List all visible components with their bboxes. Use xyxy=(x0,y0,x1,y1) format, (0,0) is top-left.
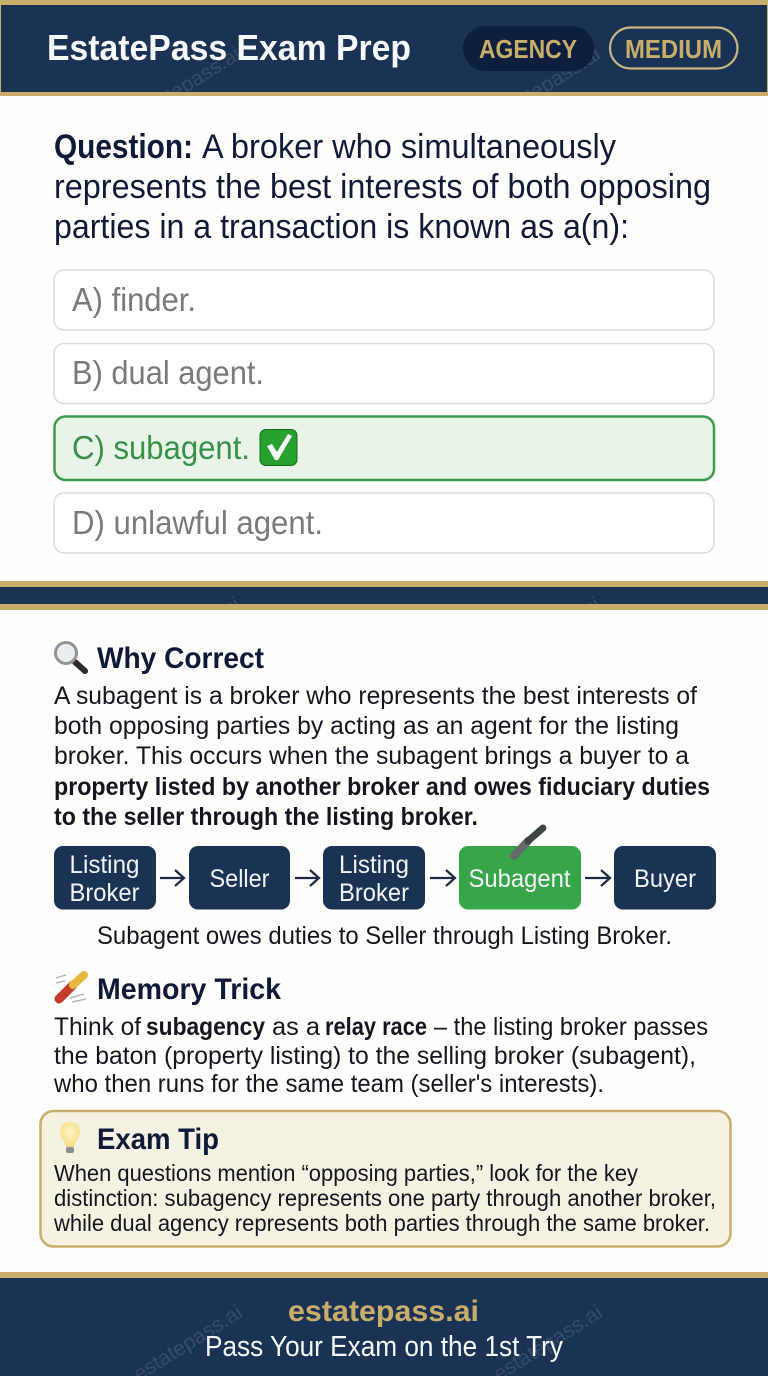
exam tip paragraph: distinction: subagency represents one party through another broker, xyxy=(54,1185,716,1211)
footer xyxy=(0,1272,768,1376)
footer brand: estatepass.ai xyxy=(288,1295,479,1328)
explanation paragraph: broker. This occurs when the subagent brings a buyer to a xyxy=(54,742,689,770)
arrow xyxy=(160,870,184,886)
heading: memory trick: Memory Trick xyxy=(97,973,281,1006)
memory trick paragraph: relay race xyxy=(325,1013,427,1041)
node: buyer xyxy=(614,846,716,910)
icon: baton xyxy=(514,828,543,856)
question text: Question: xyxy=(54,128,193,166)
memory trick paragraph: – the listing broker passes xyxy=(434,1013,708,1041)
arrow xyxy=(585,870,610,886)
arrow xyxy=(430,870,455,886)
node: listing broker xyxy=(323,846,425,910)
node: subagent xyxy=(459,846,581,910)
option A: A) finder. xyxy=(72,281,196,318)
node: listing broker: Listing xyxy=(70,851,140,879)
badge: agency xyxy=(463,26,594,71)
section divider band xyxy=(0,581,768,610)
question text: represents the best interests of both opposing xyxy=(54,168,711,206)
option C correct answer xyxy=(54,416,714,480)
callout: exam tip xyxy=(40,1111,730,1246)
header bar: estatepass.ai xyxy=(488,43,605,128)
memory trick paragraph xyxy=(53,1013,708,1098)
badge: agency: AGENCY xyxy=(479,34,577,64)
flow caption: Subagent owes duties to Seller through Listing Broker. xyxy=(97,922,672,950)
explanation paragraph: property listed by another broker and owes fiduciary duties xyxy=(54,773,710,801)
node: seller xyxy=(189,846,290,910)
node: listing broker: Broker xyxy=(70,879,140,907)
badge: medium xyxy=(610,28,738,68)
memory trick paragraph: the baton (property listing) to the selling broker (subagent), xyxy=(54,1042,696,1070)
explanation paragraph: both opposing parties by acting as an agent for the listing xyxy=(54,712,679,740)
footer tagline: Pass Your Exam on the 1st Try xyxy=(205,1331,563,1363)
icon: light bulb xyxy=(60,1122,80,1153)
section divider band: .ai xyxy=(214,593,245,624)
node: listing broker: Listing xyxy=(339,851,409,879)
explanation paragraph: to the seller through the listing broker. xyxy=(54,803,478,831)
option A xyxy=(54,270,714,330)
option B: B) dual agent. xyxy=(72,354,264,391)
heading: exam tip: Exam Tip xyxy=(97,1123,219,1156)
node: listing broker: Broker xyxy=(339,879,409,907)
explanation paragraph: A subagent is a broker who represents the best interests of xyxy=(54,682,697,710)
header title: EstatePass Exam Prep xyxy=(47,27,411,68)
memory trick paragraph: Think of xyxy=(54,1013,141,1041)
memory trick paragraph: subagency xyxy=(146,1013,265,1041)
header bar: estatepass.ai xyxy=(128,43,245,128)
exam tip paragraph xyxy=(53,1160,716,1236)
badge: medium: MEDIUM xyxy=(625,34,722,64)
heading: why correct: Why Correct xyxy=(97,642,264,675)
node: subagent: Subagent xyxy=(468,865,571,893)
header bar xyxy=(0,0,768,96)
section: why correct xyxy=(54,642,710,831)
question text: A broker who simultaneously xyxy=(202,128,616,166)
option C correct answer: C) subagent. xyxy=(72,429,250,466)
arrow xyxy=(295,870,319,886)
option D: D) unlawful agent. xyxy=(72,504,323,541)
option B xyxy=(54,344,714,404)
section: memory trick xyxy=(53,973,708,1098)
icon: magnifying glass xyxy=(56,642,85,671)
memory trick paragraph: as a xyxy=(272,1013,320,1041)
section divider band: .ai xyxy=(574,593,605,624)
icon: green check mark xyxy=(260,430,297,466)
question text xyxy=(54,128,711,246)
node: seller: Seller xyxy=(210,865,270,893)
node: buyer: Buyer xyxy=(634,865,696,893)
option D xyxy=(54,493,714,553)
memory trick paragraph: who then runs for the same team (seller's interests). xyxy=(53,1070,604,1098)
question text: parties in a transaction is known as a(n): xyxy=(54,208,629,246)
explanation paragraph xyxy=(54,682,710,831)
exam tip paragraph: When questions mention “opposing parties,” look for the key xyxy=(54,1160,638,1186)
flow diagram xyxy=(54,828,716,910)
exam tip paragraph: while dual agency represents both parties through the same broker. xyxy=(53,1210,710,1236)
node: listing broker xyxy=(54,846,156,910)
icon: relay baton xyxy=(56,975,86,1002)
